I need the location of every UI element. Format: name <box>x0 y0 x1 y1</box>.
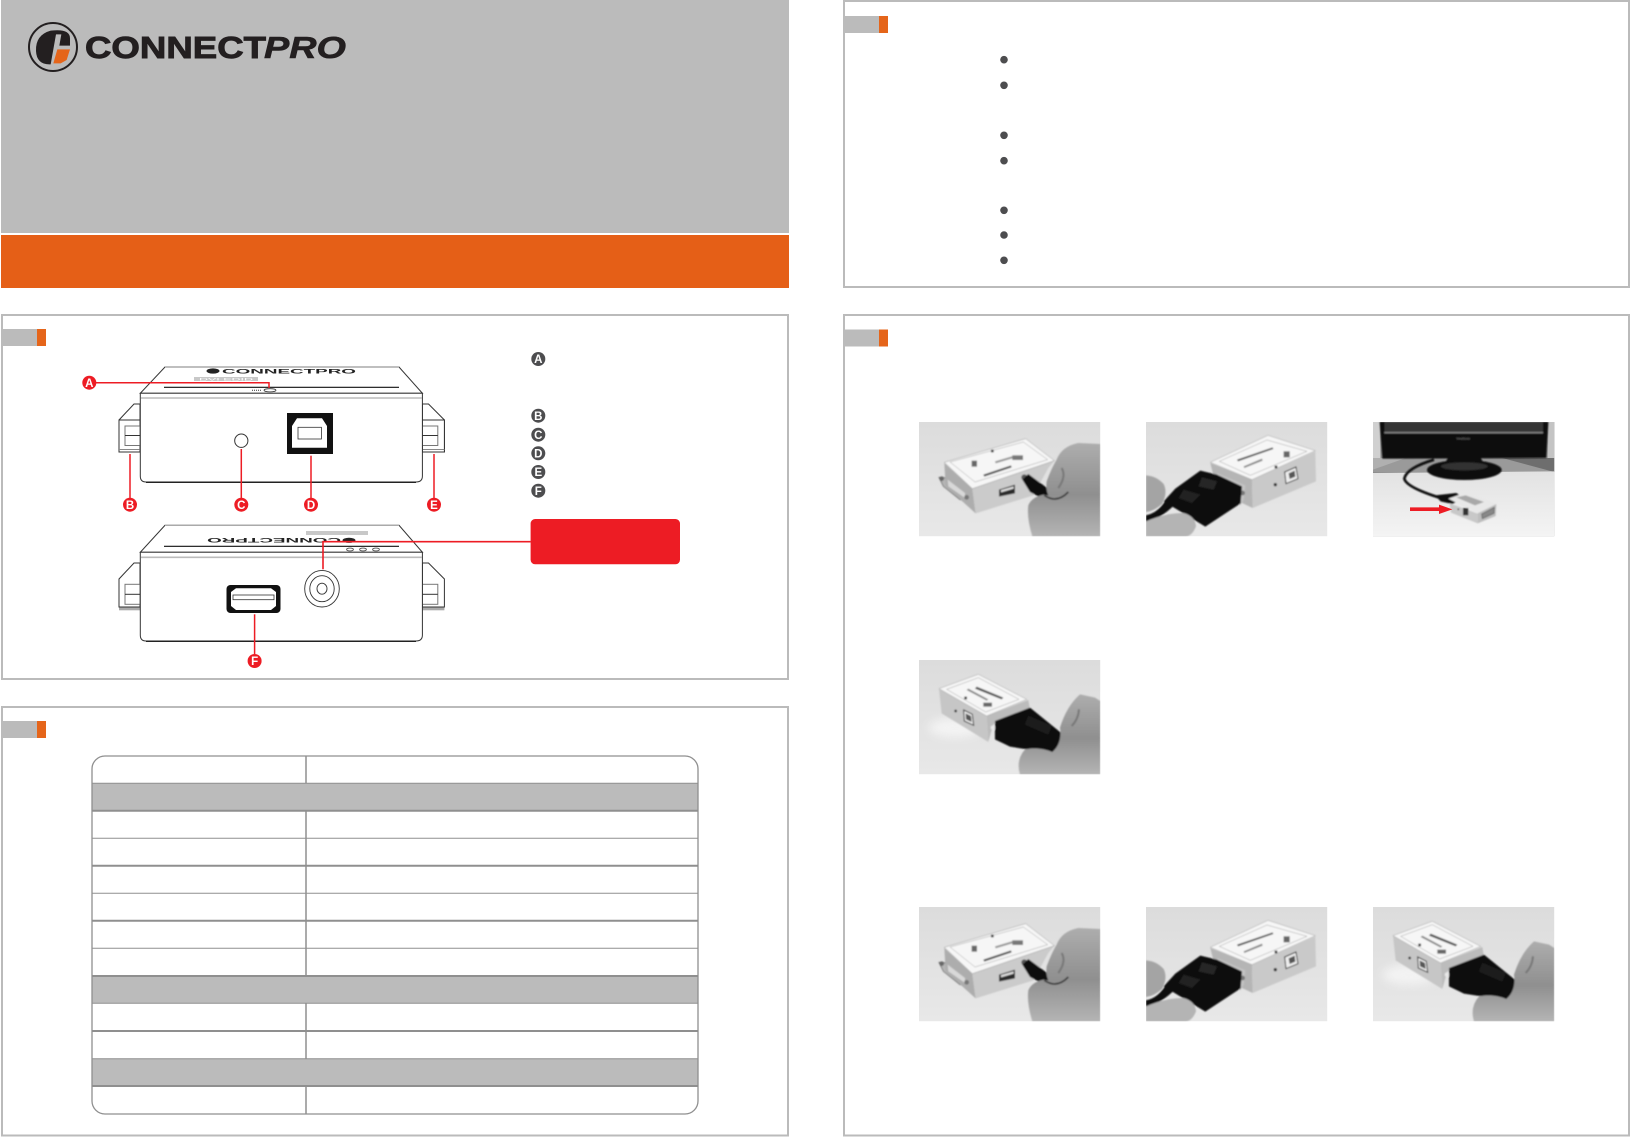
photo: unplug DVI from device <box>919 660 1100 774</box>
red badges A-F: E <box>430 500 438 512</box>
legend badges: B <box>534 411 542 423</box>
photo: plug in power again <box>919 907 1100 1021</box>
section tab <box>844 16 888 33</box>
LED <box>235 434 248 447</box>
red callout box <box>531 519 680 564</box>
USB-B port <box>287 413 333 454</box>
legend badges: F <box>535 486 542 498</box>
logo <box>29 23 346 71</box>
photo: monitor with device and red arrow: ViewSonic <box>1456 436 1471 440</box>
inverted logo <box>206 531 379 551</box>
top logo: CONNECTPRO <box>222 368 357 375</box>
red badges A-F: B <box>126 500 134 512</box>
red badges A-F: C <box>237 500 245 512</box>
header band <box>1 0 789 233</box>
panel: specifications <box>2 707 788 1136</box>
section tab <box>2 329 46 346</box>
logo: PRO <box>264 30 346 65</box>
device: rear view <box>119 525 444 641</box>
logo: CONNECT <box>85 30 266 65</box>
red callout leader <box>323 542 531 569</box>
photo: connect output DVI <box>1373 907 1554 1021</box>
legend badges: C <box>534 430 542 442</box>
photo: monitor with device and red arrow <box>1373 422 1554 536</box>
USB-A port <box>226 585 280 613</box>
top logo: DVI EDID <box>199 377 253 382</box>
legend badges: A <box>534 354 542 366</box>
inverted logo: CONNECTPRO <box>206 536 341 543</box>
legend badges: D <box>534 448 542 460</box>
callout leaders <box>89 383 434 654</box>
legend badges <box>531 352 545 498</box>
feature bullets <box>1000 56 1008 264</box>
section tab <box>844 330 888 346</box>
device: front view <box>119 367 444 482</box>
top logo <box>194 368 357 382</box>
panel: product overview <box>2 315 788 679</box>
photo: plug in power <box>919 422 1100 536</box>
red badges A-F <box>82 376 441 668</box>
specification table <box>92 756 698 1114</box>
power jack <box>305 570 339 607</box>
red badges A-F: F <box>251 656 258 668</box>
photo: connect DVI again <box>1146 907 1327 1021</box>
red badges A-F: A <box>85 378 93 390</box>
panel: features <box>844 1 1629 287</box>
orange title band <box>1 235 789 288</box>
panel: installation <box>844 315 1629 1136</box>
photo: connect DVI to device <box>1146 422 1327 536</box>
red badges A-F: D <box>307 500 315 512</box>
section tab <box>2 721 46 738</box>
legend badges: E <box>534 467 542 479</box>
